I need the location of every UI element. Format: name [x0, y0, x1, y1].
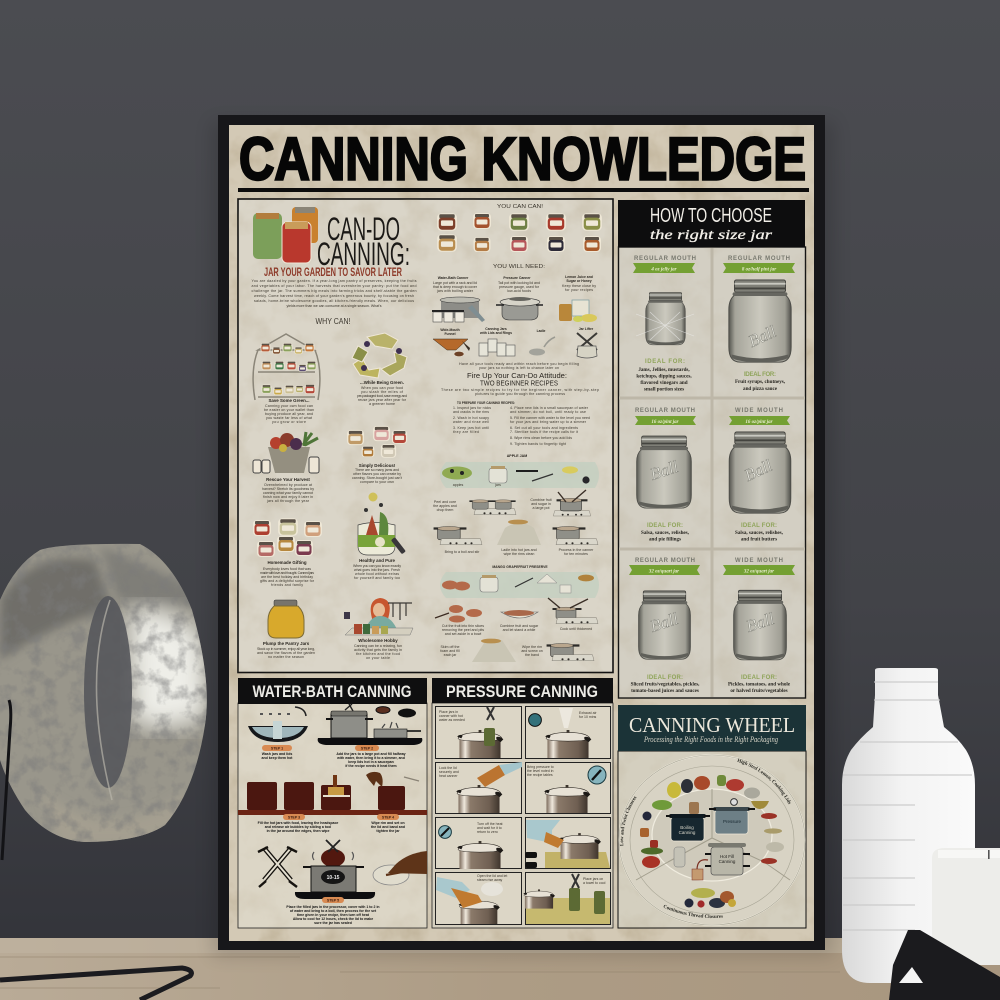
text: prepare jars recipe: 7. Sterilize tools if the recipe calls for it — [510, 430, 578, 434]
jar: quart wide mouth: WIDE MOUTH — [735, 558, 783, 564]
step 4: monitor gauge: Bring pressure to — [527, 765, 554, 769]
jar: half-pint quilted: small portion sizes — [644, 386, 684, 392]
step 7: open lid — [436, 872, 522, 924]
text: while being green: you slash the miles of — [361, 390, 403, 394]
steps: apple jam cooking: a large pot — [533, 506, 549, 510]
tool: wide-mouth funnel: Funnel — [444, 332, 456, 336]
text: wholesome hobby — [354, 638, 402, 660]
text: save some green — [264, 398, 314, 424]
step 3: secure lid: securely and — [439, 770, 459, 774]
steps: apple jam cooking: Ladle into hot jars and — [501, 548, 537, 552]
icon: recycling jars — [352, 333, 407, 378]
jar: half-pint tall: REGULAR MOUTH — [728, 256, 790, 262]
wheel labels: Low and Twist Closures — [620, 796, 636, 846]
step 4: monitor gauge — [526, 762, 610, 814]
wheel labels — [620, 758, 791, 918]
tool: water-bath canner: Large pot with a rack and lid — [433, 281, 477, 285]
heading: you can can: YOU CAN CAN! — [497, 204, 544, 210]
tool: water-bath canner — [432, 276, 485, 322]
text: save some green: you grow or store — [272, 420, 306, 424]
intro text: You are dazzled by your garden. If a year-long jam pantry of preserves, keeping the fruits — [252, 279, 417, 283]
step 2: fill canner: with water, then bring it to a simmer, and — [336, 756, 405, 760]
poster shadow — [212, 122, 834, 956]
step 5: process jars: 10-15 — [327, 875, 340, 881]
steps: preserve cooking — [435, 598, 598, 662]
steps 3 and 4: fill jars: tighten the jar — [376, 829, 400, 833]
header: how to choose — [618, 200, 805, 247]
heading: apple jam: APPLE JAM — [507, 454, 527, 458]
jar: quart regular mouth: REGULAR MOUTH — [635, 558, 695, 564]
steps: apple jam cooking: wipe the rims clean — [504, 552, 534, 556]
steps: apple jam cooking: for ten minutes — [564, 552, 588, 556]
steps: preserve cooking: each jar — [444, 653, 457, 657]
intro text: yields more than we can consume at a single season. What's — [286, 304, 382, 308]
step 4: monitor gauge: the level noted in — [527, 769, 554, 773]
text: healthy and pure — [353, 558, 401, 580]
pot: hot fill canning: Hot Fill — [720, 854, 734, 859]
jar: pint wide mouth: Ball — [741, 456, 775, 485]
step 5: process jars: time given in your recipe, then turn off heat — [297, 913, 370, 917]
intro text: and vegetables of your labor. The harvests that overwhelm your pantry: put the food and — [252, 284, 416, 288]
steps: apple jam cooking: Combine fruit — [530, 498, 552, 502]
steps: preserve cooking: and set aside in a bowl — [445, 632, 481, 636]
text: prepare jars recipe: water and rinse well — [453, 420, 489, 424]
steps: preserve cooking: Combine fruit and sugar — [500, 624, 539, 628]
step 5: process jars: sure the jar has sealed — [314, 921, 352, 925]
panel: apple jam ingredients: apples — [453, 483, 463, 487]
step 3: secure lid: Lock the lid — [439, 766, 457, 770]
text: simply delicious: other flavors you can create by — [353, 472, 401, 476]
step 1: load jars: canner with hot — [439, 714, 463, 718]
tool: canning jars: Canning Jars — [485, 327, 507, 331]
jar: pint regular mouth: 16 oz/pint jar — [651, 420, 679, 425]
text: while being green: reuse jars year after year for — [358, 398, 407, 402]
jar: pint wide mouth: IDEAL FOR: — [741, 523, 777, 529]
text: plump the pantry jars: Stock up in summer, enjoy all year long, — [257, 647, 315, 651]
steps 3 and 4: fill jars: STEP 4 — [382, 816, 394, 820]
wheel diagram — [618, 754, 806, 926]
jar: pint regular mouth: IDEAL FOR: — [647, 523, 683, 529]
jar: pint regular mouth: and pie fillings — [649, 536, 681, 542]
wheel labels: Continuous Thread Closures — [664, 904, 723, 918]
step 1: wash jars: Wash jars and lids — [262, 752, 292, 756]
jar: quart regular mouth: Sliced fruits/vegetables, pickles, — [631, 682, 700, 688]
text: plump the pantry jars: and savor the flavors of the garden — [257, 651, 315, 655]
icon: simply delicious jars — [347, 426, 407, 458]
pot: pressure canning — [709, 799, 755, 834]
tool: water-bath canner: Water-Bath Canner — [438, 276, 469, 280]
heading: can-do canning — [317, 211, 410, 272]
tool: pressure canner — [496, 276, 543, 320]
step 7: open lid: Open the lid and let — [477, 874, 507, 878]
jar: pint regular mouth: Salsa, sauces, relishes, — [641, 530, 690, 536]
wooden shelf — [0, 938, 1000, 1000]
steps 3 and 4: fill jars: and release air bubbles by sliding a tool — [265, 825, 331, 829]
pot: hot fill canning: Canning — [719, 859, 736, 864]
pot: hot fill canning — [674, 843, 750, 880]
text: tools note — [459, 362, 579, 370]
step 1: wash jars: and keep them hot — [262, 756, 293, 760]
header: canning wheel — [618, 705, 806, 751]
text: healthy and pure: Healthy and Pure — [359, 558, 395, 563]
text: rescue your harvest: jars all through the year — [266, 499, 310, 503]
steps: apple jam cooking: and sugar in — [531, 502, 551, 506]
steps 3 and 4: fill jars: in the jar around the edges, then wipe — [267, 829, 329, 833]
tool: jar lifter — [577, 327, 597, 358]
jar: quart regular mouth: Ball — [648, 609, 681, 636]
jar: pint regular mouth — [635, 408, 696, 542]
header: how to choose: HOW TO CHOOSE — [650, 205, 772, 227]
pot: boiling water canning: Canning — [679, 830, 696, 835]
tool: lemon juice and sugar: for your recipes — [565, 288, 593, 292]
text: simply delicious: canning. Store-bought just can't — [352, 476, 402, 480]
jar: quart regular mouth — [629, 558, 700, 694]
step 1: load jars — [436, 706, 522, 758]
step 2: vent steam — [526, 706, 610, 758]
steps: apple jam cooking: Bring to a boil and stir — [445, 550, 480, 554]
text: prepare jars recipe: and simmer, do not boil, until ready to use — [510, 410, 586, 414]
step 8: remove jars: Place jars on — [583, 877, 603, 881]
tool: pressure canner: Pressure Canner — [503, 276, 531, 280]
jar: quart wide mouth: Ball — [744, 609, 777, 636]
text: homemade gifting — [260, 560, 315, 587]
tool: wide-mouth funnel — [433, 328, 470, 357]
wheel labels: High Sted Lemon, Cooking Lids — [737, 758, 791, 804]
poster frame — [218, 115, 825, 950]
tool: jar lifter: Jar Lifter — [579, 327, 594, 331]
jar: half-pint tall: and pizza sauce — [743, 386, 778, 392]
heading: fire up your can-do attitude — [467, 371, 567, 388]
tool: ladle: Ladle — [537, 329, 546, 333]
text: prepare jars recipe: 3. Keep jars hot until — [453, 426, 489, 430]
jar: half-pint tall: Ball — [745, 322, 779, 351]
step 5: let pressure fall: Turn off the heat — [477, 822, 503, 826]
step 1: wash jars: STEP 1 — [271, 747, 283, 751]
text: prepare jars recipe: 4. Place new lids in a small saucepan of water — [510, 406, 589, 410]
text: save some green: you waste far less of what — [266, 416, 312, 420]
heading: fire up your can-do attitude: Fire Up Your Can-Do Attitude: — [467, 371, 567, 380]
header: canning wheel: CANNING WHEEL — [629, 713, 795, 737]
text: while being green: pre-packaged food, save energy and — [357, 394, 407, 398]
panel: preserve ingredients — [440, 572, 599, 598]
steps 3 and 4: fill jars — [238, 772, 427, 833]
text: plump the pantry jars: Plump the Pantry Jars — [263, 641, 310, 646]
steps: apple jam cooking: chop them — [437, 508, 453, 512]
icon: woman with kitchen tools — [344, 598, 413, 635]
text: homemade gifting: gifts and a delightful surprise for — [260, 579, 315, 583]
text: while being green: ...While Being Green. — [360, 380, 404, 385]
text: save some green: be easier on your wallet than — [264, 408, 314, 412]
steps: preserve cooking: foam and fill — [440, 649, 460, 653]
steps: apple jam cooking: Peel and core — [434, 500, 456, 504]
steps 3 and 4: fill jars: Wipe rim and set on — [371, 821, 405, 825]
heading: fire up your can-do attitude: TWO BEGINNER RECIPES — [480, 378, 558, 388]
white candle — [932, 848, 1000, 965]
text: homemade gifting: Homemade Gifting — [267, 560, 307, 565]
tool: lemon juice and sugar: Keep these close by — [562, 284, 596, 288]
steps: preserve cooking: removing the peel and pits — [442, 628, 484, 632]
text: plump the pantry jars — [257, 641, 315, 659]
intro text: challenge the jar. The summers big meals into farming tricks and shelf-stable the garden — [252, 289, 416, 293]
tool: pressure canner: Tall pot with locking lid and — [498, 281, 540, 285]
step 4: monitor gauge: the recipe tables — [527, 773, 553, 777]
text: prepare jars recipe: they are filled — [453, 430, 479, 434]
jar: pint wide mouth: and fruit butters — [741, 536, 777, 542]
panel: apple jam ingredients — [440, 462, 599, 488]
text: while being green — [357, 380, 407, 406]
step 5: let pressure fall — [436, 818, 522, 869]
text: prepare jars recipe: 6. Set out all your tools and ingredients — [510, 426, 578, 430]
panel: canning wheel — [618, 705, 806, 928]
text: recipes intro — [441, 388, 599, 396]
tool: water-bath canner: that is deep enough to cover — [433, 285, 478, 289]
tool: canning jars — [479, 327, 515, 356]
step 5: process jars: Place the filled jars in the processor, cover with 1 to 2 in — [286, 905, 380, 909]
tool: lemon juice and sugar: Sugar or Honey — [566, 279, 592, 283]
jar: quart wide mouth: IDEAL FOR: — [741, 675, 777, 681]
text: wholesome hobby: Wholesome Hobby — [358, 638, 398, 643]
jar: pint wide mouth: Salsa, sauces, relishes, — [735, 530, 784, 536]
step 3: secure lid: heat canner — [439, 774, 458, 778]
header: pressure canning — [432, 678, 613, 703]
heading: can-do canning: CAN-DO — [327, 211, 400, 247]
step 1: load jars: Place jars in — [439, 710, 458, 714]
intro text: salads, home-brine wholesome goodies, all kitchen-friendly meals. When, our delicious — [254, 299, 414, 303]
heading: mango chutney recipe: MANGO GRAPEFRUIT PRESERVE — [492, 565, 548, 569]
header: how to choose: the right size jar — [650, 228, 773, 243]
text: rescue your harvest: canning what your family cannot — [263, 491, 313, 495]
step 2: vent steam: for 10 mins — [579, 715, 597, 719]
jar: half-pint quilted: IDEAL FOR: — [645, 359, 685, 365]
step 2: fill canner: STEP 2 — [361, 747, 373, 751]
text: simply delicious: There are so many jams and — [355, 468, 399, 472]
jar: quart wide mouth: 32 oz/quart jar — [743, 570, 774, 574]
icon: three preserve jars — [253, 207, 318, 263]
text: prepare jars recipe: 9. Tighten bands to fingertip tight — [510, 442, 566, 446]
jar: quart wide mouth: Pickles, tomatoes, and whole — [728, 682, 791, 688]
icon: jar shelves — [253, 334, 320, 400]
heading: can-do canning: CANNING: — [317, 236, 410, 272]
text: simply delicious — [352, 463, 402, 484]
step 2: fill canner: Add the jars to a large pot and fill halfway — [336, 752, 406, 756]
jars row: what you can can — [437, 213, 602, 252]
pot: boiling water canning — [666, 802, 710, 841]
steps: preserve cooking: Cut the fruit into thin slices — [442, 624, 484, 628]
jar: quart regular mouth: IDEAL FOR: — [647, 675, 683, 681]
text: healthy and pure: whole food without extras — [355, 572, 399, 576]
header: water-bath canning — [238, 678, 427, 704]
text: wholesome hobby: Canning can be a relaxing, fun — [354, 644, 402, 648]
text: healthy and pure: what goes into the jars. Fresh — [354, 568, 400, 572]
jar: half-pint quilted: flavored vinegars and — [640, 380, 688, 386]
steps: preserve cooking: Cook until thickened — [560, 627, 592, 631]
step 5: let pressure fall: and wait for it to — [477, 826, 502, 830]
jar: half-pint tall: IDEAL FOR: — [744, 372, 776, 378]
jar: half-pint quilted: Jams, Jellies, mustards, — [638, 367, 690, 373]
text: while being green: a greener home — [369, 402, 395, 406]
text: prepare jars recipe: 8. Wipe rims clean before you add lids — [510, 436, 572, 440]
step 3: secure lid — [436, 762, 522, 814]
jar: half-pint quilted: 4 oz jelly jar — [650, 268, 677, 272]
text: prepare jars recipe: 1. Inspect jars for nicks — [453, 406, 491, 410]
steps: apple jam cooking: the apples and — [433, 504, 457, 508]
jar: half-pint quilted: ketchups, dipping sauces, — [636, 374, 692, 380]
icon: jar of healthy vegetables — [358, 492, 406, 555]
text: prepare jars recipe: 2. Wash in hot soapy — [453, 416, 489, 420]
step 5: process jars: STEP 5 — [327, 899, 339, 903]
text: healthy and pure: for yourself and family too — [354, 576, 400, 580]
steps: preserve cooking: and let stand a while — [503, 628, 535, 632]
text: simply delicious: Simply Delicious! — [359, 463, 396, 468]
foods around wheel — [640, 775, 784, 908]
step 5: process jars — [258, 840, 427, 925]
step 5: process jars: of water and bring to a boil, then process for the set — [290, 909, 377, 913]
text: save some green: buying produce all year, and — [265, 412, 313, 416]
jar: pint wide mouth — [729, 408, 791, 542]
text: recipes intro: pictures to guide you through the canning process — [475, 392, 565, 396]
text: homemade gifting: made with love and thought. Canned jars — [260, 571, 314, 575]
jar: quart wide mouth: or halved fruits/vegetables — [730, 688, 788, 694]
tool: wide-mouth funnel: Wide-Mouth — [440, 328, 460, 332]
step 5: let pressure fall: return to zero — [477, 830, 498, 834]
text: homemade gifting: are the best holiday and birthday — [261, 575, 313, 579]
intro text: weekly. Come harvest time, reach of your garden's generous bounty, by focusing on fresh — [254, 294, 414, 298]
steps: preserve cooking: Wipe the rim — [522, 645, 542, 649]
panel: water-bath canning — [238, 678, 427, 928]
step 5: process jars: Allow to cool for 12 hours, check the lid to make — [293, 917, 373, 921]
text: prepare jars recipe: and cracks in the rims — [453, 410, 489, 414]
pot: boiling water canning: Boiling — [680, 825, 694, 830]
step 2: fill canner: keep lids hot in a saucepan — [348, 760, 394, 764]
steps 3 and 4: fill jars: Fill the hot jars with food, leaving the headspace — [258, 821, 338, 825]
jar: quart wide mouth — [723, 558, 795, 694]
jar: pint wide mouth: WIDE MOUTH — [735, 408, 783, 414]
icon: yellow jar — [268, 600, 304, 638]
header: canning wheel: Processing the Right Foods in the Right Packaging — [643, 734, 778, 744]
jar: half-pint tall: 8 oz/half pint jar — [742, 268, 776, 272]
steps: apple jam cooking: Process in the canner — [559, 548, 594, 552]
step 2: vent steam: Exhaust air — [579, 711, 597, 715]
text: tools note: Have all your tools ready and within reach before you begin filling — [459, 362, 579, 366]
text: rescue your harvest: Overwhelmed by produce at — [264, 483, 312, 487]
steps: apple jam cooking — [433, 490, 598, 556]
text: simply delicious: compare to your own — [360, 480, 394, 484]
panel: can-do canning — [238, 199, 613, 672]
jar: half-pint quilted — [633, 256, 696, 392]
step 8: remove jars: a towel to cool — [583, 881, 606, 885]
text: homemade gifting: friends and family — [271, 583, 303, 587]
tool: lemon juice and sugar — [559, 275, 597, 322]
panel: apple jam ingredients: jars — [494, 483, 501, 487]
text: plump the pantry jars: no matter the season — [268, 655, 304, 659]
step 8: remove jars — [523, 872, 610, 924]
panel: how to choose — [618, 200, 806, 698]
text: rescue your harvest: harvest? Stretch its goodness by — [262, 487, 314, 491]
intro text — [252, 279, 417, 308]
header: pressure canning: PRESSURE CANNING — [446, 682, 598, 701]
jar: half-pint tall — [723, 256, 795, 392]
header: water-bath canning: WATER-BATH CANNING — [252, 682, 412, 701]
tool: pressure canner: pressure gauge, used for — [499, 285, 540, 289]
steps: preserve cooking: Skim off the — [441, 645, 459, 649]
steps: preserve cooking: and screw on — [521, 649, 543, 653]
jar: pint regular mouth: REGULAR MOUTH — [635, 408, 695, 414]
jar: half-pint quilted: REGULAR MOUTH — [634, 256, 696, 262]
icon: harvest basket — [253, 432, 319, 473]
decorative metal pan on stand — [0, 540, 212, 1000]
tool: canning jars: with Lids and Rings — [479, 331, 512, 335]
heading: why can: WHY CAN! — [316, 317, 350, 326]
step 2: fill canner: if the recipe needs it heat them — [345, 764, 397, 768]
text: recipes intro: These are two simple recipes to try for the beginner canner, with step-by-step — [441, 388, 599, 392]
tool: water-bath canner: jars with boiling water — [436, 289, 474, 293]
text: wholesome hobby: on your table — [366, 656, 390, 660]
steps 3 and 4: fill jars: the lid and band and — [371, 825, 405, 829]
jar: half-pint tall: Fruit syrups, chutneys, — [735, 379, 786, 385]
tool: ladle — [529, 329, 555, 356]
jar: quart regular mouth: 32 oz/quart jar — [648, 570, 679, 574]
subheading: JAR YOUR GARDEN TO SAVOR LATER — [264, 267, 402, 279]
text: wholesome hobby: the kitchen and the food — [356, 652, 400, 656]
text: rescue your harvest: finish now and enjoy it later in — [263, 495, 313, 499]
jar: pint wide mouth: 16 oz/pint jar — [745, 420, 773, 425]
steps: preserve cooking: the band — [525, 653, 539, 657]
text: rescue your harvest: Rescue Your Harvest — [266, 477, 310, 482]
step 1: load jars: water as needed — [439, 718, 465, 722]
pot: pressure canning: Pressure — [723, 819, 741, 824]
text: homemade gifting: Everybody loves food that was — [263, 567, 311, 571]
text: prepare jars recipe: 5. Fill the canner with water to the level you need — [510, 416, 590, 420]
steps 3 and 4: fill jars: STEP 3 — [288, 816, 300, 820]
step 7: open lid: steam rise away — [477, 878, 503, 882]
heading: you will need: YOU WILL NEED: — [493, 264, 545, 270]
title: CANNING KNOWLEDGE — [239, 126, 806, 192]
text: tools note: your jars so nothing is left to chance later on — [479, 366, 559, 370]
poster paper — [229, 125, 814, 941]
panel: pressure canning — [432, 678, 613, 928]
step 2: fill canner — [318, 704, 422, 768]
white ceramic bottle — [842, 668, 975, 983]
text: wholesome hobby: activity that gets the family in — [354, 648, 402, 652]
text: healthy and pure: When you can you know exactly — [353, 564, 401, 568]
text: prepare jars recipe: TO PREPARE YOUR CANNING RECIPES: — [457, 401, 515, 405]
icon: homemade gifting jars — [253, 518, 322, 557]
tool: lemon juice and sugar: Lemon Juice and — [565, 275, 593, 279]
text: prepare jars recipe: for your jars and bring water up to a simmer — [510, 420, 587, 424]
tool: pressure canner: low-acid foods — [507, 289, 531, 293]
step 6: move canner — [525, 818, 610, 868]
text: while being green: When you can your food — [361, 386, 403, 390]
black leather strap — [889, 930, 1000, 1000]
jar: pint regular mouth: Ball — [648, 457, 681, 484]
text: save some green: Save Some Green... — [268, 398, 310, 403]
jar: quart regular mouth: tomato-based juices and sauces — [631, 688, 699, 694]
text: save some green: Canning your own food can — [265, 404, 313, 408]
text: rescue your harvest — [262, 477, 314, 503]
text: prepare jars recipe — [453, 401, 590, 446]
step 1: wash jars — [248, 707, 308, 760]
